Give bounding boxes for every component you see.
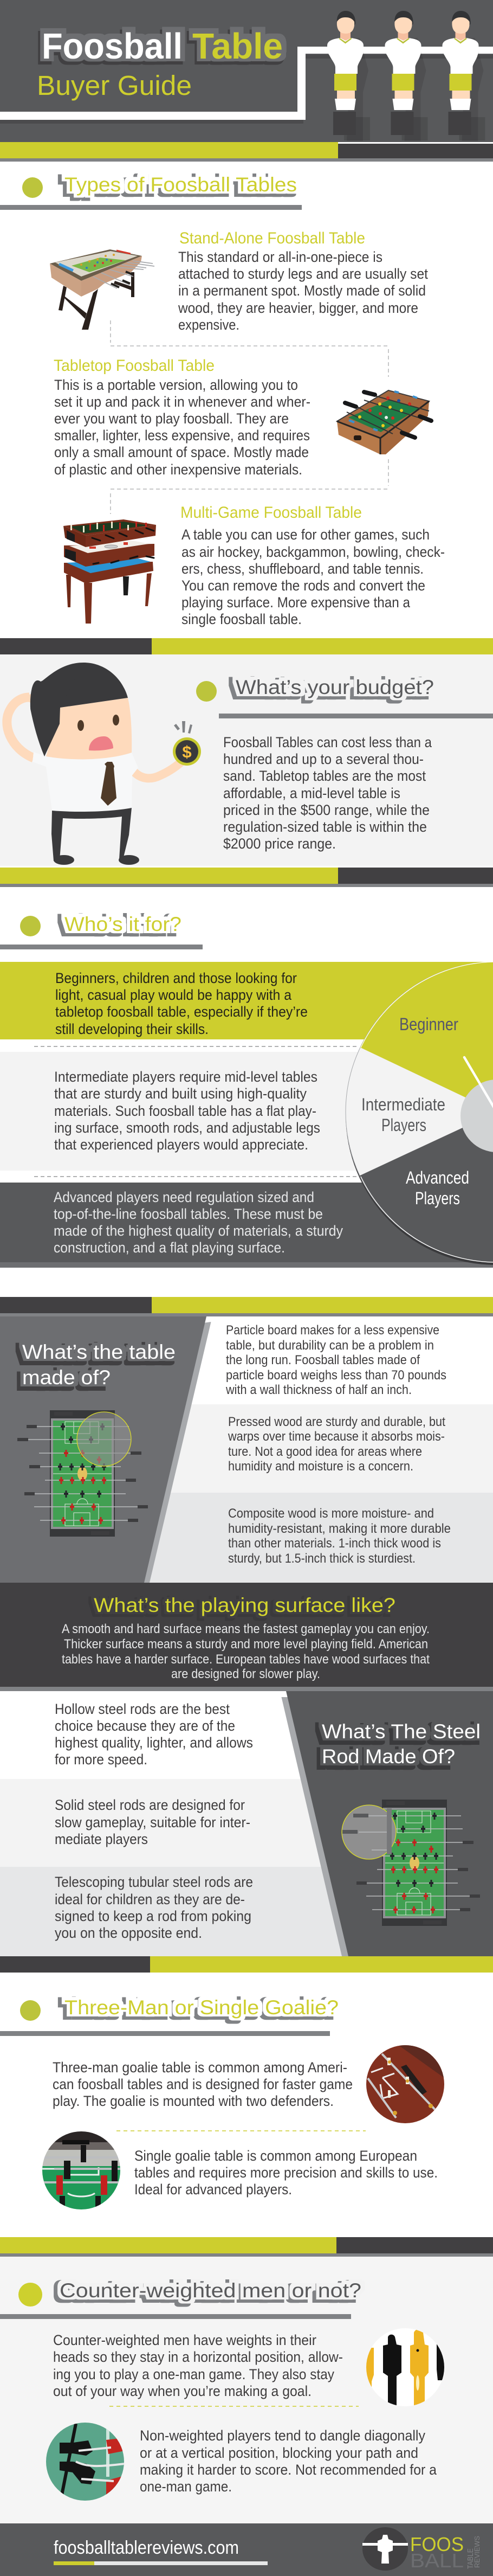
image: stand-alone table <box>50 249 154 330</box>
tabletop heading: Tabletop Foosball Table <box>54 357 215 375</box>
intermediate panel: that experienced players would appreciate. <box>54 1136 308 1153</box>
image: tabletop table <box>337 390 431 454</box>
intermediate panel: materials. Such foosball table has a flat play- <box>54 1103 316 1119</box>
particle board text: Particle board makes for a less expensive <box>226 1323 439 1338</box>
counter-weighted text: heads so they stay in a horizontal position, allow- <box>53 2349 343 2365</box>
heading: steel rod: What’s The Steel <box>322 1720 481 1743</box>
tabletop text: This is a portable version, allowing you to <box>54 377 298 393</box>
playing surface text: are designed for slower play. <box>171 1667 320 1681</box>
logo: REVIEWS <box>473 2536 481 2568</box>
footer <box>0 2523 493 2576</box>
section: goalie <box>0 1996 447 2211</box>
telescoping rods text: ideal for children as they are de- <box>55 1891 245 1907</box>
beginner panel: Beginners, children and those looking for <box>55 970 297 986</box>
material text panels <box>141 1316 493 1583</box>
subtitle: Buyer Guide <box>37 70 192 101</box>
section: types of foosball tables <box>0 174 445 627</box>
counter-weighted text: ing you to play a one-man game. They also stay <box>53 2366 334 2382</box>
multi-game heading: Multi-Game Foosball Table <box>180 504 362 522</box>
label: intermediate: Intermediate <box>361 1095 445 1114</box>
band 6 <box>0 2237 493 2257</box>
beginner panel: still developing their skills. <box>55 1021 209 1037</box>
telescoping rods text: Telescoping tubular steel rods are <box>55 1874 253 1890</box>
multi-game text: ers, chess, shuffleboard, and table tennis. <box>181 561 424 577</box>
stand-alone text: This standard or all-in-one-piece is <box>178 249 382 265</box>
photo: single goalie <box>42 2131 120 2211</box>
stand-alone text: in a permanent spot. Mostly made of solid <box>178 282 426 299</box>
label: advanced <box>406 1168 469 1208</box>
section: counter-weighted <box>0 2257 493 2523</box>
steel rod slanted panel <box>282 1691 493 1956</box>
pressed wood text: humidity and moisture is a concern. <box>228 1459 413 1474</box>
counter rule <box>0 2314 351 2319</box>
band 4 <box>0 1297 493 1316</box>
character: worried man <box>7 663 184 865</box>
label: intermediate: Players <box>381 1115 426 1135</box>
who dot <box>20 916 41 936</box>
header band <box>0 142 493 162</box>
pressed wood text <box>228 1415 445 1474</box>
needle <box>464 1057 493 1110</box>
solid rods text <box>55 1797 250 1847</box>
material slanted panel <box>0 1316 211 1583</box>
budget text: sand. Tabletop tables are the most <box>223 768 426 784</box>
solid rods text: Solid steel rods are designed for <box>55 1797 245 1813</box>
section: who's it for <box>0 913 493 1269</box>
three-man text: can foosball tables and is designed for faster game <box>53 2076 353 2092</box>
heading: goalie: Three-Man or Single Goalie? <box>64 1996 339 2019</box>
heading dot <box>22 177 43 198</box>
budget text: Foosball Tables can cost less than a <box>223 734 432 750</box>
pressed wood text: Pressed wood are sturdy and durable, but <box>228 1415 445 1429</box>
non-weighted text: Non-weighted players tend to dangle diagonally <box>140 2427 425 2444</box>
playing surface text <box>62 1622 430 1681</box>
title: Table <box>192 26 283 67</box>
title <box>42 26 283 67</box>
image: table top view with lens <box>17 1410 148 1537</box>
budget text: affordable, a mid-level table is <box>223 785 400 801</box>
image: table top view with rod lens <box>342 1800 480 1926</box>
label: advanced: Advanced <box>406 1168 469 1187</box>
counter dot <box>18 2283 42 2307</box>
band 5 <box>0 1956 493 1973</box>
steel rod text panels <box>0 1691 352 1956</box>
advanced panel: Advanced players need regulation sized and <box>54 1189 314 1205</box>
band 3 <box>0 868 493 887</box>
image: multi-game table <box>63 519 156 624</box>
particle board text: with a wall thickness of half an inch. <box>225 1383 412 1397</box>
advanced panel <box>0 1183 493 1268</box>
text: single goalie: tables and requires more precision and skills to use. <box>134 2164 438 2181</box>
budget text <box>223 734 432 852</box>
tabletop text: of plastic and other inexpensive materials. <box>54 461 302 478</box>
multi-game text <box>181 526 445 627</box>
label: intermediate <box>361 1095 445 1135</box>
advanced panel: construction, and a flat playing surface. <box>54 1239 285 1256</box>
particle board text: particle board weighs less than 70 pounds <box>226 1368 446 1383</box>
heading: budget: What’s your budget? <box>236 676 434 698</box>
title: Foosball <box>42 26 183 67</box>
heading: playing surface: What’s the playing surface like? <box>94 1594 395 1616</box>
budget text: priced in the $500 range, while the <box>223 802 430 818</box>
telescoping rods text: signed to keep a rod from poking <box>55 1908 251 1924</box>
non-weighted text: one-man game. <box>140 2478 232 2495</box>
advanced panel: made of the highest quality of materials, a sturdy <box>54 1223 343 1239</box>
counter-weighted text: out of your way when you’re making a goal. <box>53 2383 312 2399</box>
beginner panel: tabletop foosball table, especially if they’re <box>55 1004 308 1020</box>
heading rule <box>0 205 302 210</box>
heading: who: Who’s it for? <box>64 913 181 935</box>
label: advanced: Players <box>415 1189 460 1208</box>
header panel <box>0 0 493 142</box>
icon: dollar coin <box>173 721 201 766</box>
multi-game text: You can remove the rods and convert the <box>181 577 425 594</box>
telescoping rods text <box>55 1874 253 1941</box>
photo: non-weighted men <box>46 2423 125 2502</box>
composite wood text: humidity-resistant, making it more durable <box>228 1521 451 1536</box>
budget text: regulation-sized table is within the <box>223 819 427 835</box>
text: single goalie: Single goalie table is common among European <box>134 2148 417 2164</box>
stand-alone text: expensive. <box>178 317 239 333</box>
solid rods text: mediate players <box>55 1831 148 1847</box>
heading: material: What’s the table <box>22 1341 176 1363</box>
section: table material <box>0 1316 493 1583</box>
stand-alone text: attached to sturdy legs and are usually set <box>178 266 428 282</box>
multi-game text: single foosball table. <box>181 611 302 627</box>
tabletop text: ever you want to play foosball. They are <box>54 410 289 427</box>
intermediate panel <box>0 1052 379 1171</box>
composite wood text <box>228 1506 451 1566</box>
url underline <box>54 2561 268 2565</box>
non-weighted text: or at a vertical position, blocking your path and <box>140 2445 418 2461</box>
player level wheel <box>346 962 493 1265</box>
budget dot <box>196 681 217 702</box>
text: single goalie: Ideal for advanced players. <box>134 2181 292 2198</box>
heading: types: Types of Foosball Tables <box>64 174 297 196</box>
playing surface text: A smooth and hard surface means the fastest gameplay you can enjoy. <box>62 1622 430 1636</box>
who rule <box>0 945 203 949</box>
logo <box>362 2527 481 2572</box>
rod frame <box>0 47 493 124</box>
heading: material: made of? <box>22 1366 111 1389</box>
logo: BALL <box>410 2549 464 2572</box>
composite wood text: sturdy, but 1.5-inch thick is sturdiest. <box>228 1551 416 1566</box>
heading: counter: Counter-weighted men or not? <box>60 2279 361 2302</box>
tabletop text <box>54 377 310 478</box>
tabletop text: only a small amount of space. Mostly made <box>54 444 309 460</box>
stand-alone text: wood, they are heavier, bigger, and more <box>178 300 418 316</box>
beginner panel <box>0 962 493 1039</box>
heading: steel rod: Rod Made Of? <box>322 1745 455 1768</box>
photo: counter-weighted men <box>366 2328 444 2406</box>
intermediate panel: that are sturdy and built using high-quality <box>54 1085 307 1102</box>
section: budget <box>0 654 493 866</box>
pressed wood text: warps over time because it absorbs mois- <box>228 1429 445 1444</box>
solid rods text: slow gameplay, suitable for inter- <box>55 1814 250 1830</box>
photo: three-man goalie <box>366 2042 447 2123</box>
composite wood text: Composite wood is more moisture- and <box>228 1506 434 1521</box>
hollow rods text <box>55 1701 253 1768</box>
pressed wood text: ture. Not a good idea for areas where <box>228 1444 422 1459</box>
particle board text: table, but durability can be a problem in <box>226 1338 434 1353</box>
intermediate panel: Intermediate players require mid-level tables <box>54 1069 317 1085</box>
hollow rods text: Hollow steel rods are the best <box>55 1701 230 1717</box>
tabletop text: smaller, lighter, less expensive, and requires <box>54 427 310 444</box>
foosball players <box>327 11 485 141</box>
hollow rods text: highest quality, lighter, and allows <box>55 1735 253 1751</box>
non-weighted text <box>140 2427 437 2495</box>
budget rule <box>219 714 493 718</box>
particle board text: the long run. Foosball tables made of <box>226 1353 420 1367</box>
non-weighted text: making it harder to score. Not recommended for a <box>140 2462 437 2478</box>
intermediate panel: ing surface, smooth rods, and adjustable legs <box>54 1120 320 1136</box>
three-man text <box>53 2059 353 2109</box>
three-man text: Three-man goalie table is common among Ameri- <box>53 2059 347 2076</box>
band 2 <box>0 638 493 654</box>
tabletop text: set it up and pack it in whenever and wher- <box>54 394 310 410</box>
heading: material <box>22 1341 176 1389</box>
composite wood text: than other materials. 1-inch thick wood is <box>228 1536 441 1551</box>
advanced panel: top-of-the-line foosball tables. These must be <box>54 1206 323 1222</box>
section: playing surface <box>0 1583 493 1691</box>
budget text: hundred and up to a several thou- <box>223 751 424 767</box>
playing surface text: Thicker surface means a sturdy and more level playing field. American <box>64 1637 428 1652</box>
multi-game text: A table you can use for other games, such <box>181 526 430 543</box>
hollow rods text: choice because they are of the <box>55 1718 235 1734</box>
icon: dollar coin: $ <box>182 742 192 761</box>
three-man text: play. The goalie is mounted with two defenders. <box>53 2093 334 2109</box>
particle board text <box>225 1323 446 1397</box>
stand-alone text <box>178 249 428 333</box>
text: single goalie <box>134 2148 438 2198</box>
playing surface text: tables have a harder surface. European tables have wood surfaces that <box>62 1652 430 1667</box>
multi-game text: as air hockey, backgammon, bowling, check- <box>181 544 445 560</box>
section: steel rod <box>0 1691 493 1956</box>
beginner panel: light, casual play would be happy with a <box>55 987 292 1003</box>
counter-weighted text: Counter-weighted men have weights in their <box>53 2332 316 2348</box>
logo: FOOS <box>410 2533 464 2555</box>
logo: TABLE <box>466 2548 475 2569</box>
label: beginner: Beginner <box>399 1014 458 1034</box>
heading: steel rod <box>322 1720 481 1768</box>
counter-weighted text <box>53 2332 343 2399</box>
wheel hub <box>460 1080 493 1152</box>
budget text: $2000 price range. <box>223 836 336 852</box>
telescoping rods text: you on the opposite end. <box>55 1925 202 1941</box>
stand-alone heading: Stand-Alone Foosball Table <box>179 229 365 247</box>
multi-game text: playing surface. More expensive than a <box>181 594 411 611</box>
goalie dot <box>20 2000 41 2021</box>
hollow rods text: for more speed. <box>55 1751 147 1768</box>
goalie rule <box>0 2031 330 2036</box>
website url: foosballtablereviews.com <box>54 2538 239 2558</box>
